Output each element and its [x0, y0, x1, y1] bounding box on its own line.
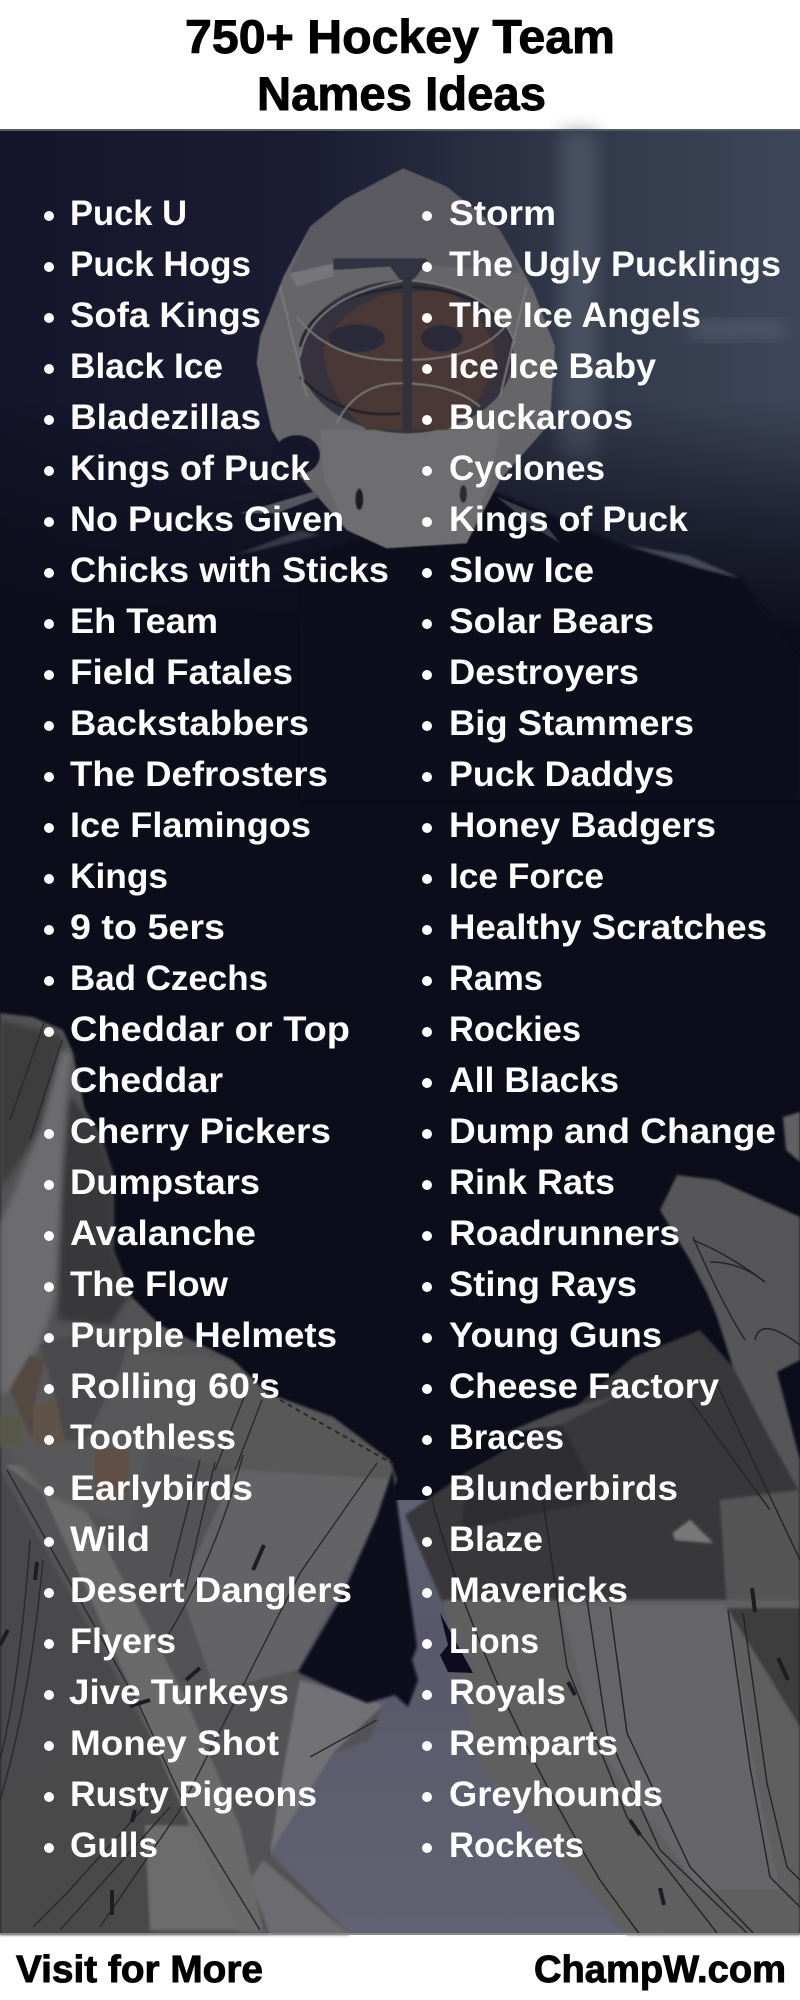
item: Avalanche: Avalanche	[70, 1214, 256, 1253]
right leg pad	[405, 1112, 800, 1935]
item: Purple Helmets: Purple Helmets	[70, 1316, 337, 1355]
item: Field Fatales: Field Fatales	[70, 653, 293, 692]
item: All Blacks: All Blacks	[449, 1061, 619, 1100]
item: Puck Hogs: Puck Hogs	[70, 245, 251, 284]
item: Solar Bears: Solar Bears	[449, 602, 654, 641]
item: Cyclones: Cyclones	[449, 449, 605, 488]
item: Healthy Scratches: Healthy Scratches	[449, 908, 767, 947]
item: Storm: Storm	[449, 194, 556, 233]
item: Eh Team: Eh Team	[70, 602, 218, 641]
item: Backstabbers: Backstabbers	[70, 704, 309, 743]
item: Bladezillas: Bladezillas	[70, 398, 261, 437]
item: Chicks with Sticks: Chicks with Sticks	[70, 551, 389, 590]
item: The Ugly Pucklings: The Ugly Pucklings	[449, 245, 781, 284]
item: Kings: Kings	[70, 857, 168, 896]
item: Royals: Royals	[449, 1673, 566, 1712]
item: Wild: Wild	[70, 1520, 150, 1559]
item: Rink Rats: Rink Rats	[449, 1163, 615, 1202]
item: The Flow: The Flow	[70, 1265, 229, 1304]
item: Buckaroos: Buckaroos	[449, 398, 633, 437]
item: Cheddar or Top Cheddar	[44, 1010, 350, 1100]
item: Sting Rays: Sting Rays	[449, 1265, 637, 1304]
item: Ice Ice Baby: Ice Ice Baby	[449, 347, 657, 386]
item: Rockets: Rockets	[449, 1826, 584, 1865]
item: Wild	[44, 1520, 150, 1559]
item: Black Ice: Black Ice	[70, 347, 223, 386]
item: Dump and Change: Dump and Change	[449, 1112, 776, 1151]
body shoulders	[235, 490, 800, 800]
item: Money Shot: Money Shot	[70, 1724, 279, 1763]
item: The Defrosters: The Defrosters	[70, 755, 328, 794]
item: Young Guns: Young Guns	[449, 1316, 662, 1355]
item: Blunderbirds: Blunderbirds	[449, 1469, 678, 1508]
item: Big Stammers: Big Stammers	[449, 704, 694, 743]
item: Flyers: Flyers	[70, 1622, 176, 1661]
icon: goalie helmet	[240, 168, 560, 548]
item: Rockies: Rockies	[449, 1010, 581, 1049]
item: Desert Danglers: Desert Danglers	[70, 1571, 352, 1610]
item: 9 to 5ers: 9 to 5ers	[70, 908, 225, 947]
item: Cheddar or Top Cheddar: Cheddar	[70, 1061, 223, 1100]
item: Kings of Puck: Kings of Puck	[70, 449, 311, 488]
item: Gulls: Gulls	[70, 1826, 158, 1865]
item: Puck U: Puck U	[70, 194, 187, 233]
title	[185, 10, 615, 120]
item: Blaze: Blaze	[449, 1520, 543, 1559]
item: Rusty Pigeons: Rusty Pigeons	[70, 1775, 317, 1814]
title: 750+ Hockey Team	[185, 10, 615, 63]
left leg pad	[0, 1013, 397, 1935]
item: Bad Czechs: Bad Czechs	[70, 959, 268, 998]
item: The Ice Angels: The Ice Angels	[449, 296, 701, 335]
item: Cheese Factory: Cheese Factory	[449, 1367, 720, 1406]
ice floor	[270, 1500, 660, 1935]
footer text: Visit for More: Visit for More	[16, 1949, 263, 1991]
item: Rams: Rams	[449, 959, 543, 998]
torn jersey hem	[298, 1470, 418, 1707]
jersey hem wedge	[440, 1613, 473, 1673]
pad marks	[0, 1545, 264, 1915]
item: Destroyers: Destroyers	[449, 653, 639, 692]
brown patches	[0, 1335, 130, 1500]
item: Mavericks: Mavericks	[449, 1571, 628, 1610]
item: Ice Flamingos: Ice Flamingos	[70, 806, 311, 845]
item: Kings of Puck: Kings of Puck	[449, 500, 689, 539]
stitching lines	[0, 1020, 395, 1930]
item: Jive Turkeys: Jive Turkeys	[69, 1673, 289, 1712]
item: Puck Daddys: Puck Daddys	[449, 755, 674, 794]
item: Honey Badgers: Honey Badgers	[449, 806, 716, 845]
item: No Pucks Given: No Pucks Given	[70, 500, 344, 539]
item: Ice Force: Ice Force	[449, 857, 604, 896]
item: Greyhounds: Greyhounds	[449, 1775, 663, 1814]
footer text: ChampW.com: ChampW.com	[534, 1949, 786, 1991]
item: Lions: Lions	[449, 1622, 539, 1661]
item: Cherry Pickers: Cherry Pickers	[70, 1112, 331, 1151]
footer	[16, 1949, 786, 1991]
item: Roadrunners: Roadrunners	[449, 1214, 680, 1253]
item: Remparts: Remparts	[449, 1724, 618, 1763]
title: Names Ideas	[257, 67, 546, 120]
item: Braces: Braces	[449, 1418, 564, 1457]
item: Cheddar or Top Cheddar: Cheddar or Top	[70, 1010, 350, 1049]
list column 1	[44, 194, 389, 1865]
item: Earlybirds: Earlybirds	[70, 1469, 253, 1508]
item: Dumpstars: Dumpstars	[70, 1163, 260, 1202]
list column 2	[422, 194, 781, 1865]
item: Slow Ice: Slow Ice	[449, 551, 594, 590]
item: Sofa Kings: Sofa Kings	[70, 296, 261, 335]
item: Rolling 60's: Rolling 60’s	[70, 1367, 280, 1406]
item: Toothless: Toothless	[70, 1418, 236, 1457]
